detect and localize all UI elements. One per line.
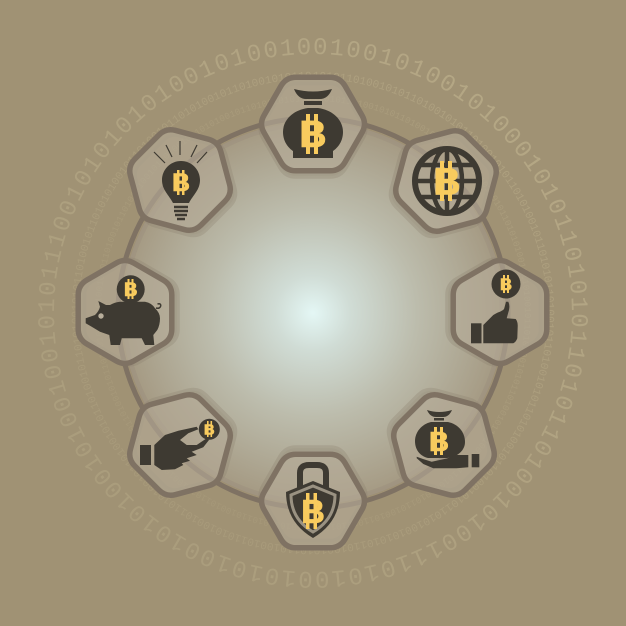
hexagon: thumbs up <box>448 260 547 364</box>
hexagon: padlock shield: B <box>301 493 325 530</box>
middle binary ring: 101011010010101101001010110100101011010100101101010110100101101001010110101001011010010101101010010101011010010101101001011010100101101010010110100101011010010110101001010110100101101010100101101001011010100101101001010110 <box>72 72 554 554</box>
hexagon: piggy bank <box>78 260 177 364</box>
hexagon: money bag in hand <box>370 371 514 515</box>
hexagon: money bag in hand: B <box>429 426 449 457</box>
hexagon: globe <box>372 111 516 255</box>
inner ring shadow <box>124 124 502 502</box>
outer binary ring: 0100101001010001010110101011010110100101001110101001010100101010010100100101011100101010101001010010 <box>38 38 588 588</box>
connecting ring <box>118 118 508 508</box>
hexagon: hand with coin: B <box>204 422 215 438</box>
hexagon: light bulb: B <box>172 169 190 197</box>
hexagon: globe: B <box>433 162 461 204</box>
hexagon: money bag: B <box>299 114 327 156</box>
hexagon: light bulb <box>110 110 254 254</box>
hexagon: thumbs up: B <box>500 275 512 294</box>
hexagon: hand with coin <box>110 371 254 515</box>
hexagon: padlock shield <box>262 448 364 548</box>
central light disk <box>122 122 504 504</box>
hexagon: money bag <box>262 77 364 176</box>
hexagon: piggy bank: B <box>124 280 138 301</box>
inner binary ring: 100101101001010110100101101010010110100101101010100101101001011010100101011010010110100101011010010101101001011010101001011010010101101001011010100101101010010110100101011010010110101001010110100101101010100101101001011010100101101001010110 <box>198 100 526 428</box>
